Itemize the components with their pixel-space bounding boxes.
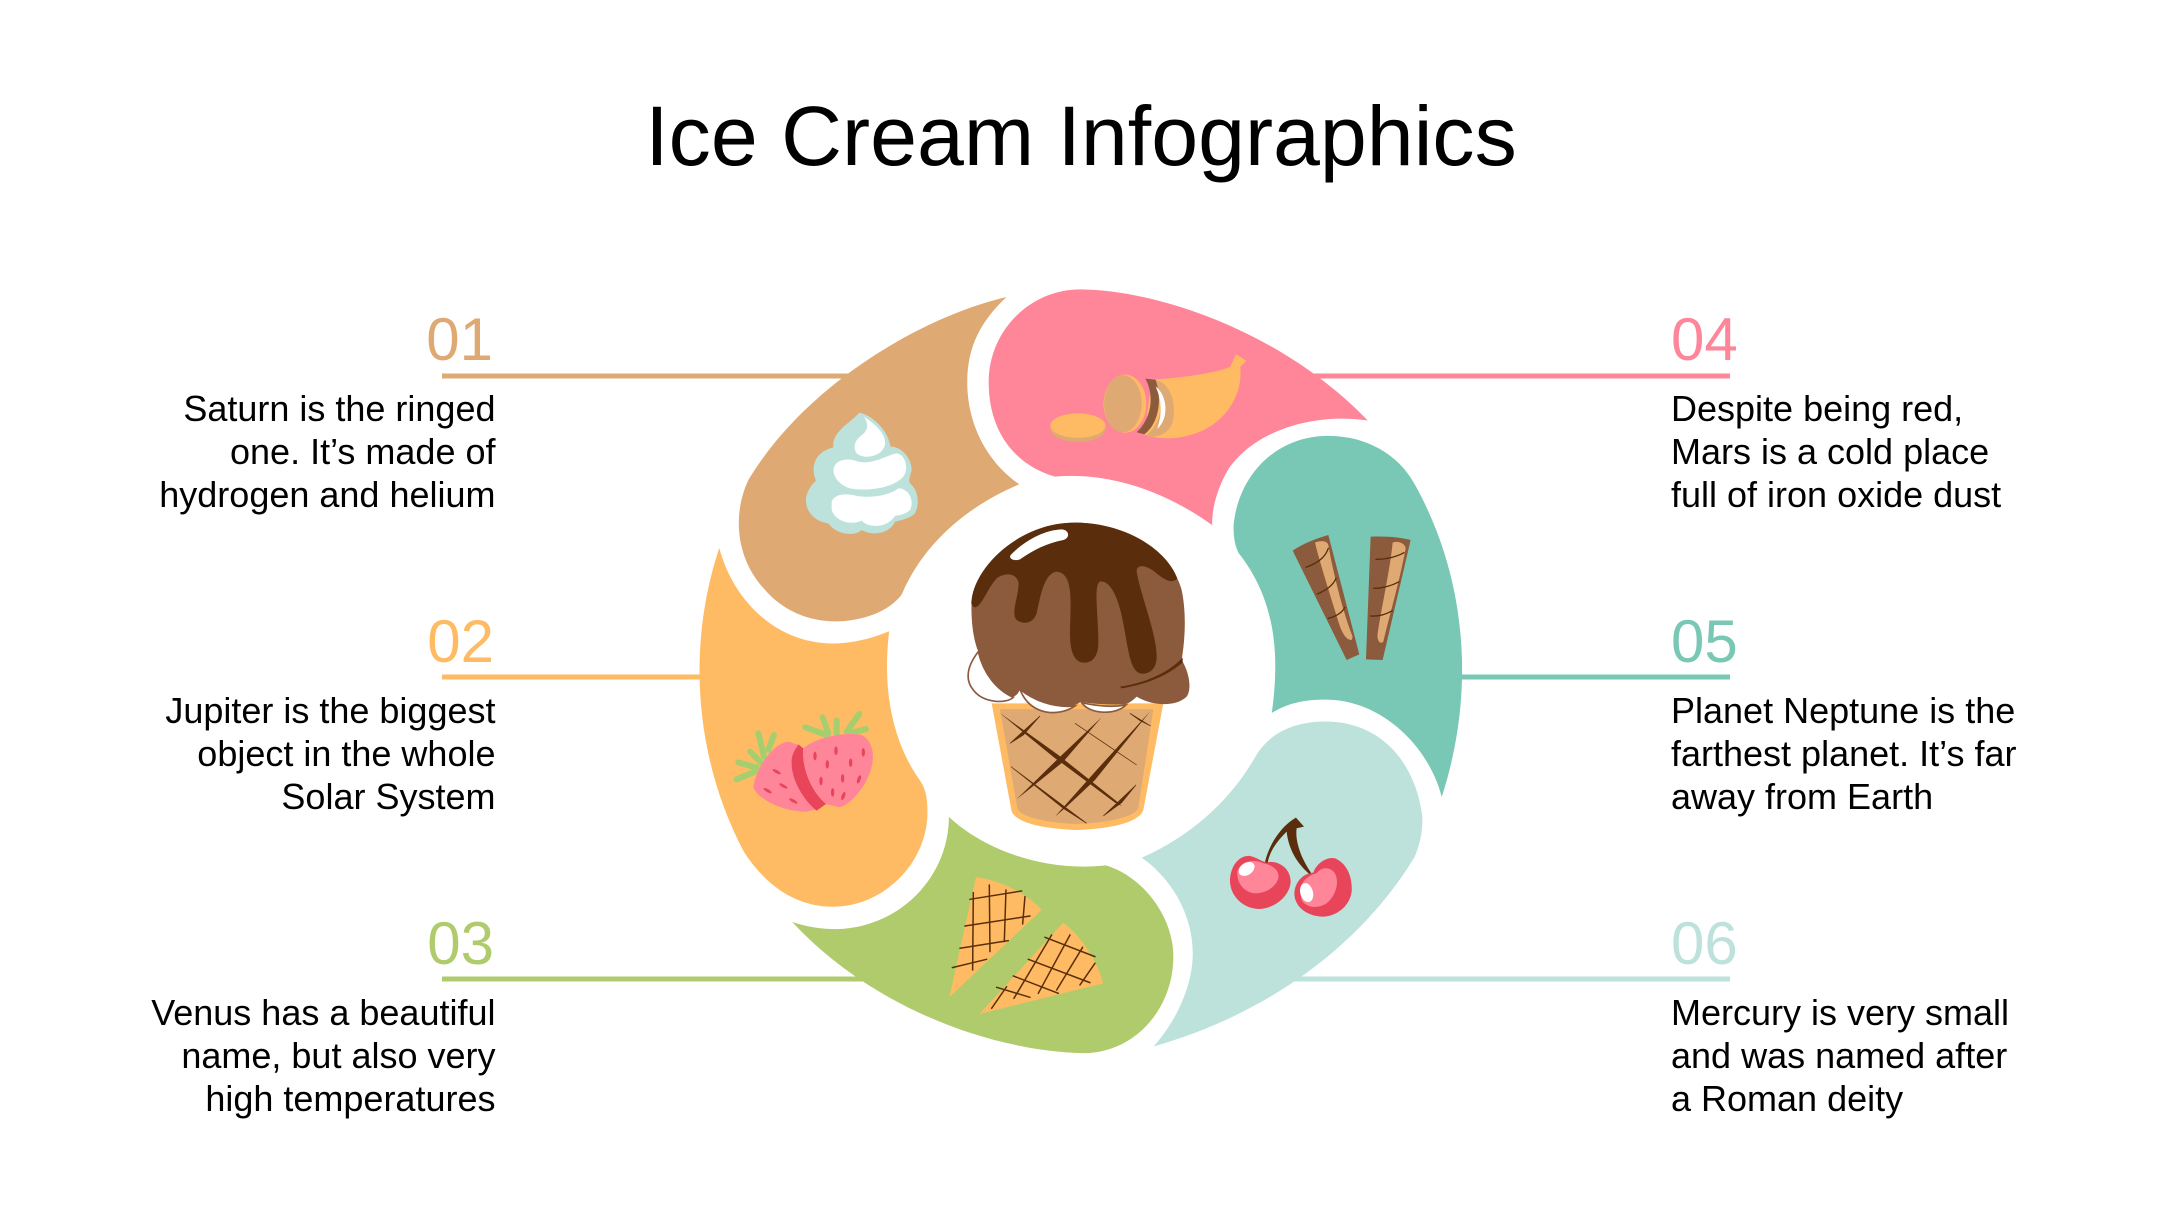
- segment 04 pink with banana: [989, 289, 1368, 525]
- text block 04: Mars is a cold place: [1671, 431, 1989, 472]
- text block 04: 04: [1671, 306, 1738, 373]
- highlight: [1010, 529, 1068, 560]
- text block 02: object in the whole: [197, 733, 496, 774]
- segment 05 teal with wafer rolls: [1234, 436, 1462, 797]
- scoop fold line: [1120, 658, 1183, 688]
- text block 05: Planet Neptune is the: [1671, 690, 2015, 731]
- icon: strawberries: [737, 714, 873, 812]
- text block 02: Jupiter is the biggest: [165, 690, 496, 731]
- text block 06: and was named after: [1671, 1035, 2007, 1076]
- text block 01: [159, 306, 496, 515]
- segment 01 tan with whipped cream: [739, 297, 1019, 621]
- text block 02: 02: [427, 608, 494, 675]
- text block 04: [1671, 306, 2001, 515]
- segment 03 green with wafer cones: [792, 817, 1173, 1053]
- text block 06: Mercury is very small: [1671, 992, 2009, 1033]
- text block 05: farthest planet. It’s far: [1671, 733, 2017, 774]
- text block 03: Venus has a beautiful: [151, 992, 496, 1033]
- icon: wafer rolls: [1293, 535, 1411, 660]
- text block 01: Saturn is the ringed: [183, 388, 496, 429]
- text block 01: 01: [426, 306, 493, 373]
- text block 06: a Roman deity: [1671, 1078, 1903, 1119]
- text block 02: [165, 608, 496, 817]
- chocolate drip: [971, 523, 1177, 674]
- text block 03: 03: [427, 910, 494, 977]
- text block 01: hydrogen and helium: [159, 474, 496, 515]
- segment 02 orange with strawberries: [700, 548, 927, 907]
- cone: [992, 703, 1163, 830]
- segment 06 mint with cherries: [1142, 722, 1422, 1047]
- text block 02: Solar System: [281, 776, 496, 817]
- icon: banana: [1050, 354, 1246, 442]
- text block 03: high temperatures: [205, 1078, 496, 1119]
- connector lines: [442, 376, 1730, 979]
- ring diagram: [700, 289, 1462, 1053]
- scoop: [971, 523, 1189, 706]
- icon: whipped cream: [806, 413, 918, 534]
- text block 06: 06: [1671, 910, 1738, 977]
- text block 05: [1671, 608, 2017, 817]
- text block 03: [151, 910, 496, 1119]
- text block 06: [1671, 910, 2009, 1119]
- text block 01: one. It’s made of: [230, 431, 496, 472]
- text block 04: Despite being red,: [1671, 388, 1963, 429]
- text block 05: 05: [1671, 608, 1738, 675]
- text block 05: away from Earth: [1671, 776, 1933, 817]
- text block 03: name, but also very: [181, 1035, 496, 1076]
- icon: wafer cones: [949, 877, 1103, 1014]
- central ice cream: [968, 523, 1189, 830]
- title: Ice Cream Infographics: [645, 89, 1517, 183]
- white cream: [968, 652, 1126, 713]
- text block 04: full of iron oxide dust: [1671, 474, 2001, 515]
- icon: cherries: [1230, 818, 1352, 917]
